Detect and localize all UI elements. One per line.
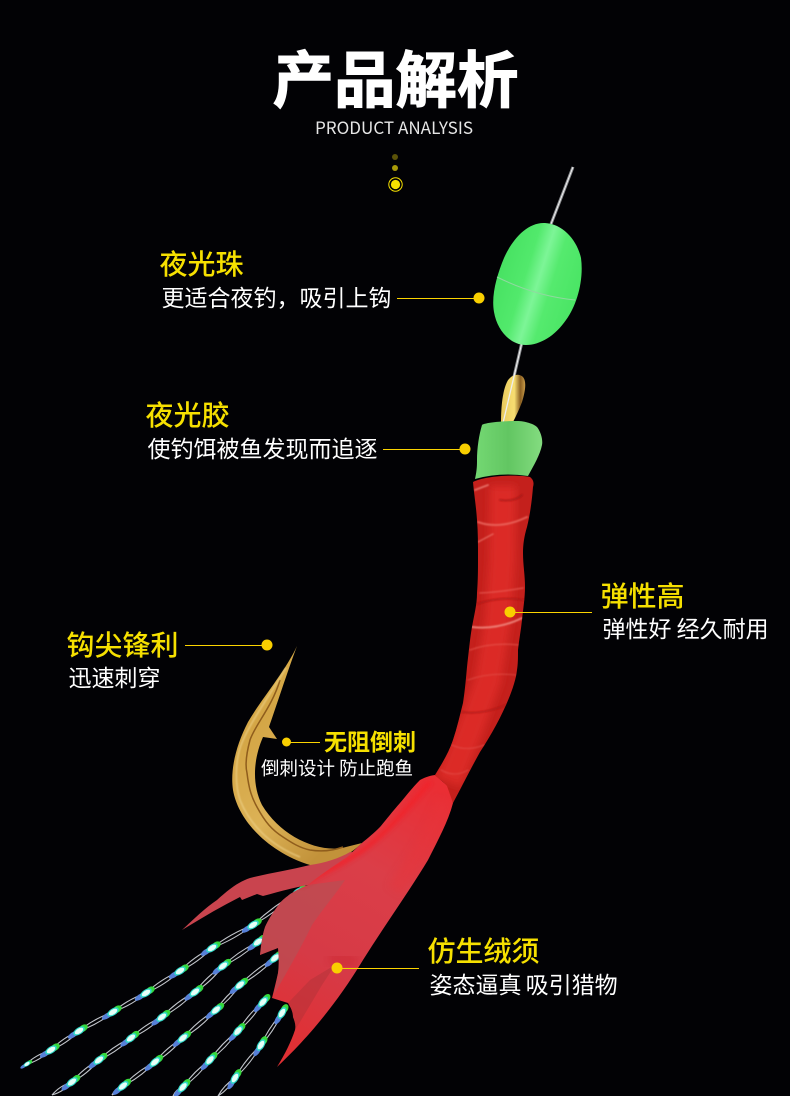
heading: 无阻倒刺	[324, 723, 416, 757]
heading: 弹性高	[600, 581, 685, 612]
red feather tail	[182, 775, 453, 1067]
description: 倒刺设计 防止跑鱼	[261, 755, 413, 781]
body shading and wrap streaks	[441, 485, 527, 782]
leader	[185, 640, 272, 650]
luminous bead	[493, 223, 582, 345]
main feather	[260, 775, 453, 1067]
glow glue	[475, 421, 542, 479]
description: 弹性好 经久耐用	[602, 610, 769, 644]
leader	[383, 444, 470, 454]
heading: 仿生绒须	[428, 936, 540, 967]
gold sleeve	[501, 375, 525, 422]
callout: barb	[261, 723, 416, 781]
red wrapped body	[435, 476, 534, 803]
upper feather strand	[182, 852, 395, 930]
callout: sharp point	[66, 630, 272, 693]
strand 1	[19, 884, 308, 1070]
strand 4	[172, 992, 272, 1096]
filaments	[19, 884, 308, 1096]
feather folds	[260, 782, 445, 1030]
strand 5	[218, 1003, 290, 1096]
leader	[282, 738, 320, 746]
decorative title dots	[389, 154, 402, 191]
strand 3	[111, 949, 285, 1096]
title: 产品解析	[272, 31, 519, 120]
callout: feather	[332, 936, 618, 1000]
description: 使钓饵被鱼发现而追逐	[148, 430, 378, 464]
leader	[504, 606, 592, 618]
subtitle: PRODUCT ANALYSIS	[315, 114, 473, 139]
gold hook	[232, 646, 362, 865]
heading: 夜光珠	[160, 249, 244, 280]
description: 迅速刺穿	[68, 659, 160, 693]
callout: high elasticity	[504, 581, 769, 644]
callout: luminous glue	[146, 400, 470, 464]
fishing line	[503, 167, 573, 424]
description: 更适合夜钓，吸引上钩	[162, 279, 392, 313]
callout: luminous bead	[160, 249, 484, 313]
strand 2	[52, 933, 268, 1095]
heading: 夜光胶	[146, 400, 230, 431]
line through sleeve	[503, 370, 516, 423]
description: 姿态逼真 吸引猎物	[430, 966, 618, 1000]
leader	[332, 962, 419, 974]
leader	[397, 292, 484, 304]
heading: 钩尖锋利	[66, 630, 179, 661]
